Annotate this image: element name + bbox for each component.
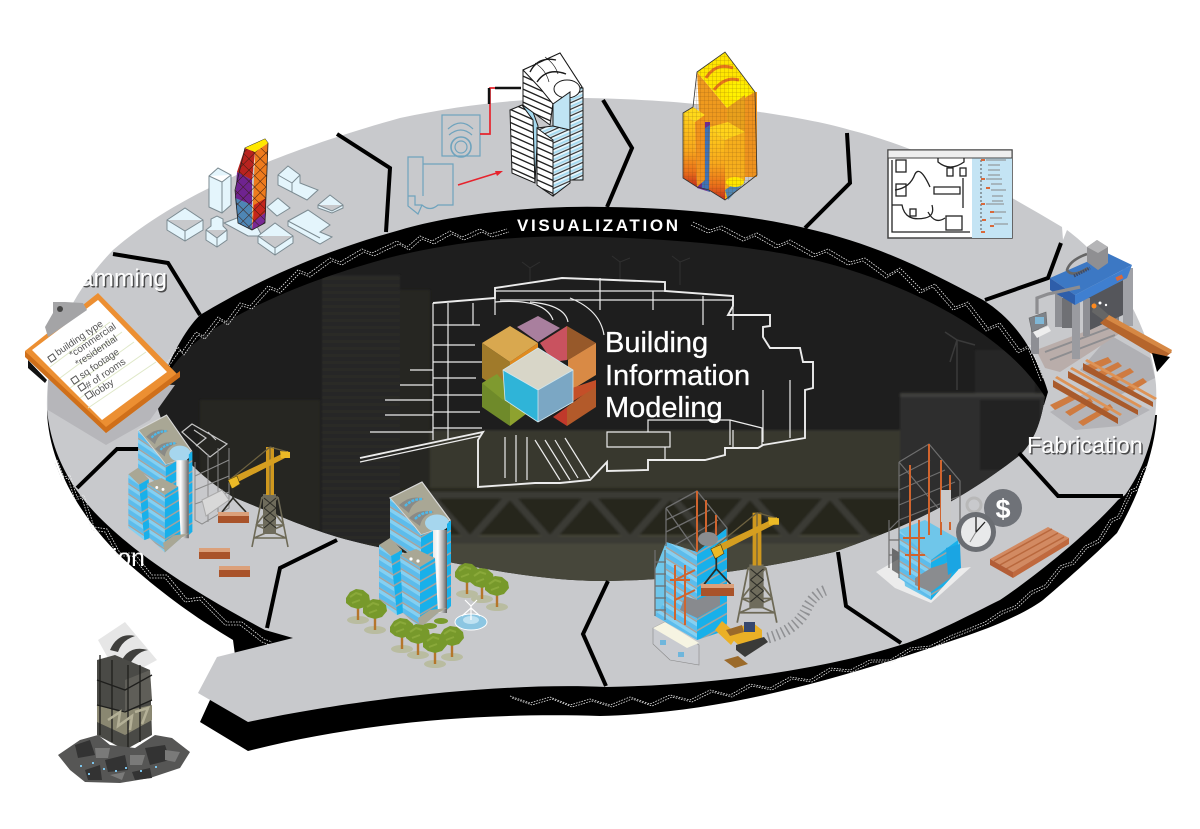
icon: clipboard checklist: sq footage bbox=[78, 346, 122, 381]
label: programming: Programming bbox=[20, 265, 167, 292]
icon: renovation tower bbox=[128, 415, 192, 552]
icon: stopwatch and dollar coin: $ bbox=[995, 494, 1011, 524]
icon: CAD drawings to model arrow bbox=[408, 88, 521, 214]
logo: BIM cube bbox=[482, 316, 596, 426]
icon: demolished building bbox=[58, 622, 190, 783]
icon: yellow crane with bricks bbox=[199, 447, 290, 577]
icon: clipboard checklist: # of rooms bbox=[84, 356, 128, 391]
icon: clipboard checklist bbox=[25, 293, 180, 445]
icon: stacked lumber bbox=[990, 527, 1069, 578]
ring: grey process platform bbox=[47, 98, 1156, 722]
icon: stopwatch and dollar coin bbox=[956, 489, 1022, 552]
icon: clipboard checklist: building type bbox=[54, 318, 106, 358]
central dark scene bbox=[157, 236, 1045, 588]
icon: heat-map tower bbox=[683, 52, 757, 200]
icon: multicoloured tower bbox=[235, 139, 268, 230]
icon: second crane, bulldozer and tracks bbox=[701, 513, 826, 668]
icon: floor plan with tree list bbox=[888, 150, 1012, 238]
title: building information modeling bbox=[605, 327, 750, 424]
icon: steel beam stack bbox=[1050, 357, 1157, 430]
title: building information modeling: Building bbox=[605, 327, 708, 359]
icon: city massing model bbox=[167, 139, 343, 255]
icon: renovation scaffold bbox=[182, 424, 229, 524]
label: renovation: Renovation bbox=[22, 546, 146, 574]
icon: fabrication machine bbox=[1029, 240, 1172, 395]
label: fabrication: Fabrication bbox=[1027, 432, 1143, 458]
icon: wireframe tower bbox=[510, 53, 583, 196]
black inner band bbox=[157, 207, 1048, 405]
title: building information modeling: Information bbox=[605, 360, 750, 392]
icon: steel frame tower bbox=[876, 444, 971, 603]
icon: landscaped trees and fountain bbox=[346, 563, 509, 668]
icon: clipboard checklist: *commercial bbox=[68, 321, 118, 360]
icon: clipboard checklist: *residential bbox=[74, 333, 120, 369]
label: renovation bbox=[114, 548, 144, 566]
black band zigzag dashed lines bbox=[55, 222, 1150, 707]
label: programming bbox=[83, 268, 167, 292]
label: programming: Programming bbox=[22, 266, 169, 294]
icon: construction tower with crane bbox=[653, 491, 727, 665]
ring base: black drop band bbox=[47, 410, 1157, 751]
label: renovation: Renovation bbox=[20, 545, 145, 572]
heading: visualization: VISUALIZATION bbox=[517, 216, 678, 235]
label: fabrication: Fabrication bbox=[1028, 434, 1144, 460]
title: building information modeling: Modeling bbox=[605, 392, 723, 424]
dividers between lifecycle stages bbox=[77, 100, 1123, 686]
wireframe building outline bbox=[360, 278, 813, 487]
icon: clipboard checklist: lobby bbox=[91, 377, 116, 399]
icon: finished tower bbox=[379, 482, 451, 628]
